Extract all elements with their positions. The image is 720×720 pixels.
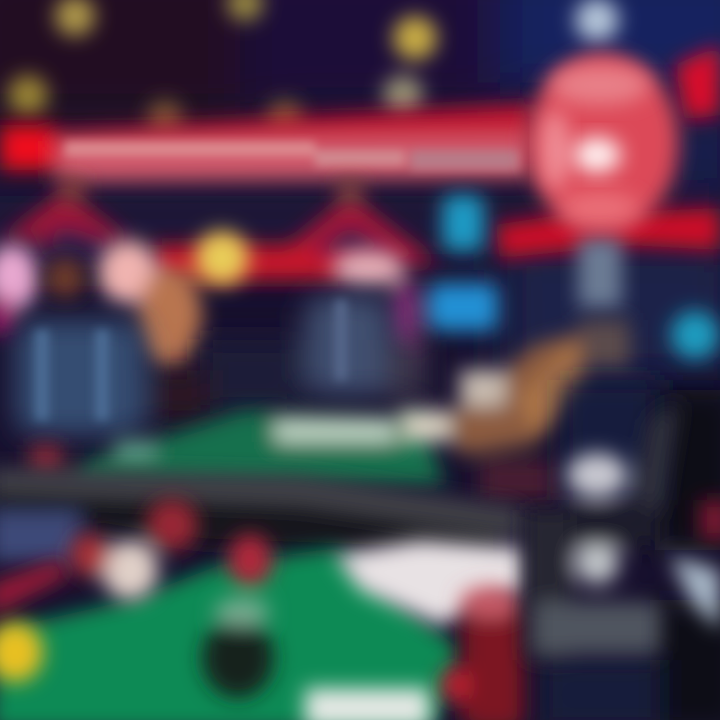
player details (35, 300, 347, 420)
foreground felt (0, 548, 460, 720)
circular logo (527, 53, 679, 233)
dark chair, right (540, 380, 720, 720)
poker table felt, far (30, 410, 445, 485)
logo post (578, 238, 622, 308)
coloured lights: middle row (0, 195, 719, 370)
red stripe left (0, 560, 70, 615)
background: upper stage wall (0, 0, 720, 380)
chair frame and white highlights (525, 400, 720, 660)
chips and cards on felt (0, 499, 274, 698)
dealer with long hair (400, 320, 630, 500)
stage lights: top row (8, 0, 619, 136)
red chip stack (441, 586, 524, 720)
seated players (15, 295, 425, 435)
red bunting triangles (0, 190, 440, 280)
player heads (45, 180, 362, 298)
white cards (305, 540, 525, 720)
table rail (0, 468, 530, 562)
banner highlights (65, 142, 520, 170)
red banner (0, 45, 720, 258)
